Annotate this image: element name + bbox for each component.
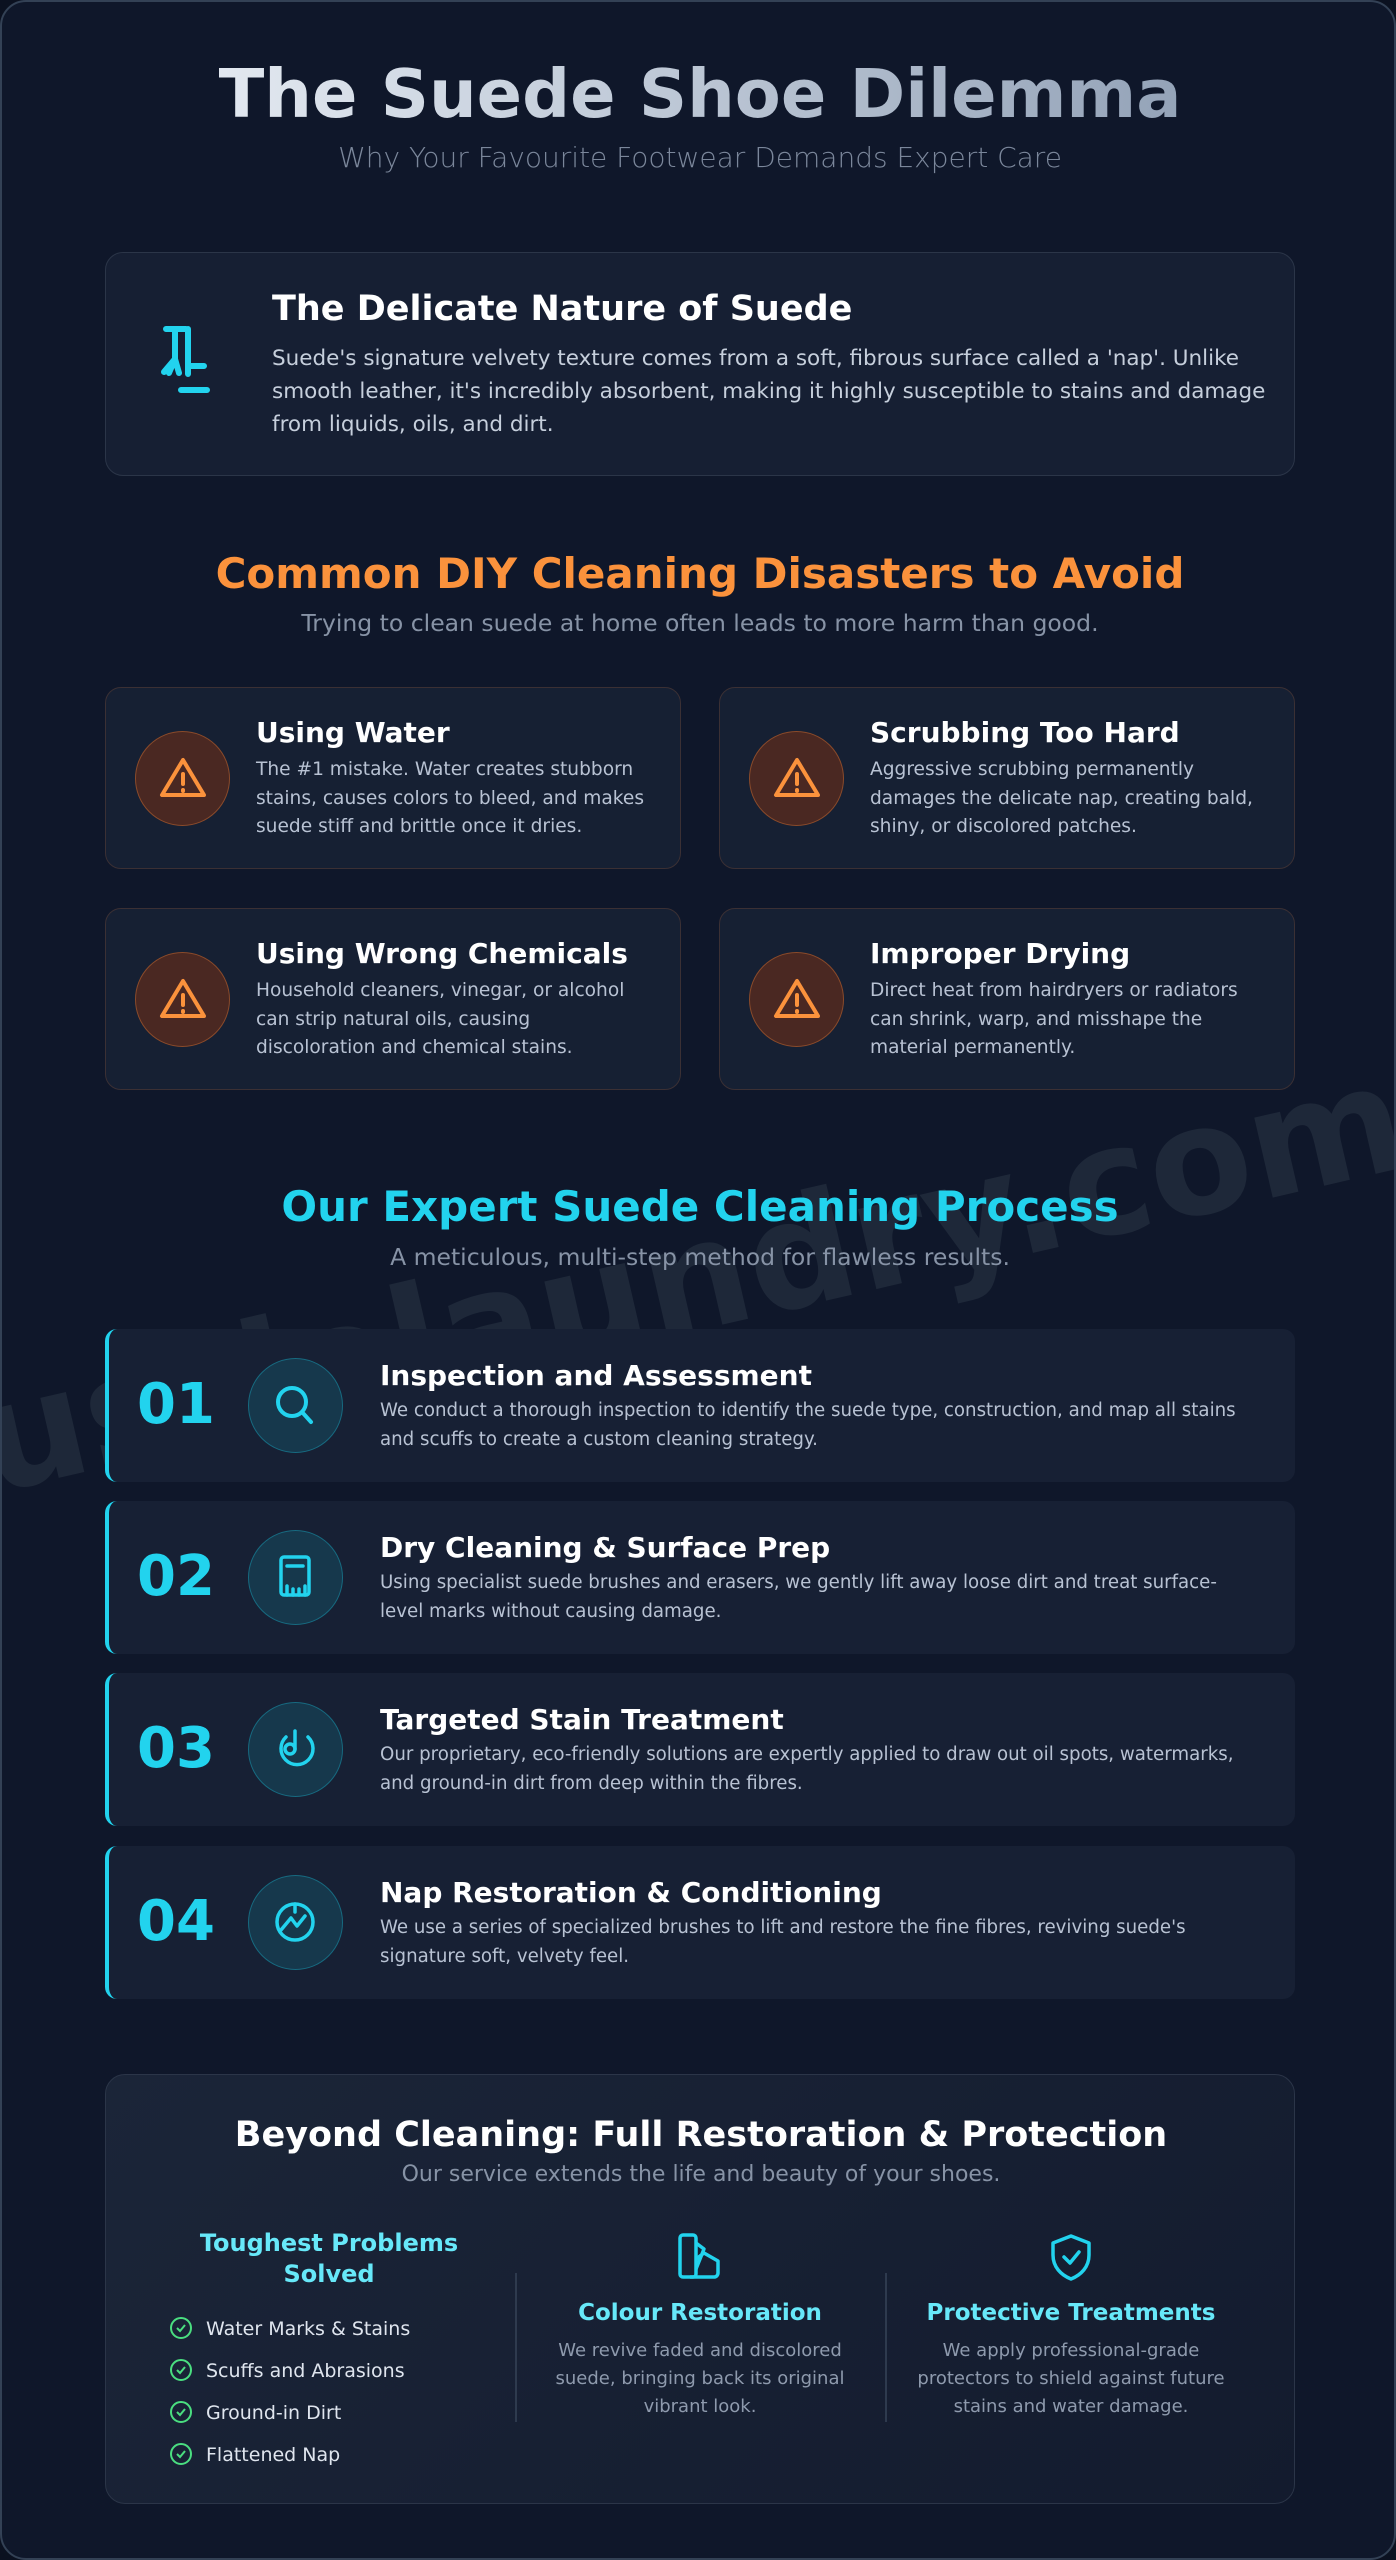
card: using water: Using Water [256,716,450,749]
column: colour restoration: Colour Restoration [578,2300,822,2326]
step 01: Inspection and Assessment [380,1359,812,1392]
column: toughest problems: Solved [283,2260,375,2288]
step 04: Nap Restoration & Conditioning [380,1876,882,1909]
column: toughest problems: Toughest Problems [200,2229,458,2257]
card: scrubbing [719,687,1295,869]
step 02: Using specialist suede brushes and erasers, we gently lift away loose dirt and treat surface- [380,1572,1217,1593]
icon: gauge [248,1875,343,1970]
subheading: Our service extends the life and beauty of your shoes. [402,2162,1000,2187]
icon: warning [135,731,230,826]
heading: process: Our Expert Suede Cleaning Process [281,1182,1119,1231]
checklist: Water Marks & Stains [206,2318,410,2340]
step 04: 04 [137,1889,215,1954]
heading: Beyond Cleaning: Full Restoration & Protection [235,2115,1167,2155]
icon: swatch [678,2233,720,2279]
icon: warning [135,952,230,1047]
card: chemicals: Using Wrong Chemicals [256,937,628,970]
column: toughest problems [170,2229,458,2466]
icon: warning [749,952,844,1047]
column: colour restoration: We revive faded and discolored suede, bringing back its original vibrant look. [556,2340,844,2417]
step 04: We use a series of specialized brushes to lift and restore the fine fibres, reviving suede's [380,1917,1186,1938]
subheading: Trying to clean suede at home often leads to more harm than good. [301,609,1099,637]
card: scrubbing: Aggressive scrubbing permanently damages the delicate nap, creating bald, shiny, or discolored patches. [870,759,1253,837]
subheading: A meticulous, multi-step method for flawless results. [390,1243,1010,1271]
checklist: Flattened Nap [206,2444,340,2466]
subtitle: Why Your Favourite Footwear Demands Expert Care [338,141,1062,174]
card: drying: Direct heat from hairdryers or radiators can shrink, warp, and misshape the material permanently. [870,980,1238,1058]
step 02: 02 [137,1544,215,1609]
card: chemicals: discoloration and chemical stains. [256,1037,573,1058]
card: scrubbing: Scrubbing Too Hard [870,716,1180,749]
icon: suede [161,326,210,393]
step 04: signature soft, velvety feel. [380,1946,629,1966]
checklist: Scuffs and Abrasions [206,2360,405,2382]
step 03: Targeted Stain Treatment [380,1703,784,1736]
checklist [170,2317,410,2466]
text: Suede's signature velvety texture comes from a soft, fibrous surface called a 'nap'. Unlike smooth leather, it's incredibly absorbent, making it highly susceptible to stains and damage from liquids, oils, and dirt. [272,346,1265,437]
step 02: level marks without causing damage. [380,1600,721,1622]
panel: beyond cleaning [105,2074,1295,2504]
icon: brush [248,1530,343,1625]
icon: shield [1051,2234,1091,2281]
card: drying [719,908,1295,1090]
card: drying: Improper Drying [870,937,1130,970]
column: protective treatments [917,2234,1225,2417]
card: using water [105,687,681,869]
step 04 [105,1846,1295,1999]
step 01: We conduct a thorough inspection to identify the suede type, construction, and map all stains [380,1400,1236,1421]
card: chemicals: Household cleaners, vinegar, or alcohol can strip natural oils, causing [256,980,624,1030]
step 01: and scuffs to create a custom cleaning strategy. [380,1428,818,1450]
step 03 [105,1673,1295,1826]
card: using water: The #1 mistake. Water creates stubborn stains, causes colors to bleed, and makes suede stiff and brittle once it dries. [256,759,644,837]
step 01: 01 [137,1372,215,1437]
card: chemicals [105,908,681,1090]
column: protective treatments: We apply professional-grade protectors to shield against future stains and water damage. [917,2340,1225,2417]
step 02: Dry Cleaning & Surface Prep [380,1531,830,1564]
icon: warning [749,731,844,826]
step 03: Our proprietary, eco-friendly solutions are expertly applied to draw out oil spots, watermarks, [380,1744,1234,1765]
heading: The Delicate Nature of Suede [272,289,852,329]
column: colour restoration [556,2233,844,2417]
step 03: and ground-in dirt from deep within the fibres. [380,1772,803,1794]
column: protective treatments: Protective Treatments [927,2300,1215,2326]
icon: search [248,1358,343,1453]
icon: drop target [248,1702,343,1797]
divider [515,2273,516,2422]
heading: disasters: Common DIY Cleaning Disasters to Avoid [216,549,1184,598]
checklist: Ground-in Dirt [206,2402,341,2424]
step 02 [105,1501,1295,1654]
title: The Suede Shoe Dilemma [219,55,1181,133]
step 01 [105,1329,1295,1482]
panel: delicate nature [105,252,1295,476]
step 03: 03 [137,1716,215,1781]
